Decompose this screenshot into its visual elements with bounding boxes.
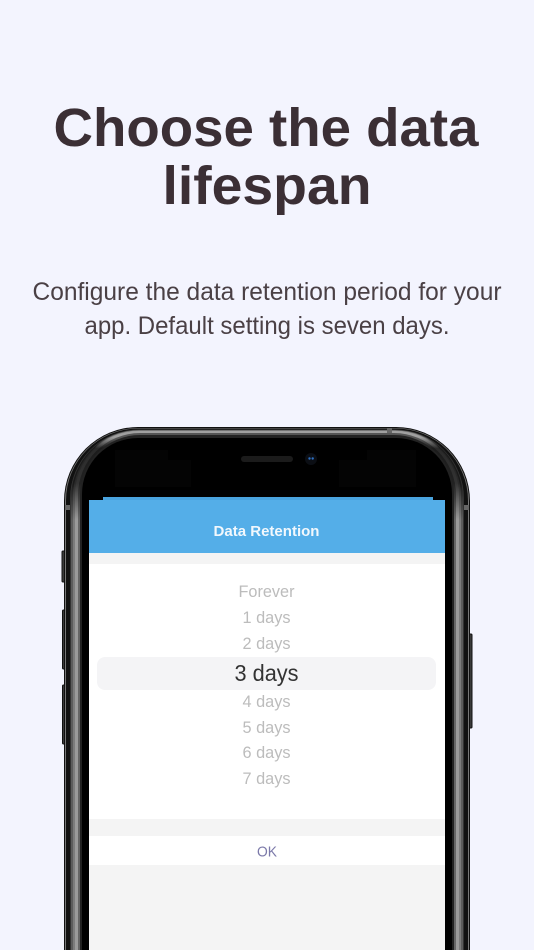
notch shapes [115,450,416,487]
retention options list: 2 days [242,635,290,653]
header bar [89,497,445,553]
antenna marks [65,428,469,510]
retention options list: 6 days [242,744,290,762]
retention options list: 1 days [242,609,290,627]
screen background [89,553,445,950]
retention options list [234,583,298,788]
phone side buttons [62,551,472,744]
title: lifespan [162,156,372,216]
description text [32,278,502,340]
camera [305,453,317,465]
retention options list: 4 days [242,693,290,711]
bottom grey area [89,865,445,950]
title [54,98,479,216]
retention options list: Forever [238,583,295,601]
header bar: Data Retention [214,524,320,540]
title: Choose the data [54,98,479,158]
phone mockup [62,427,472,950]
grey divider band [89,819,445,836]
retention options list: 7 days [242,770,290,788]
OK button: OK [257,844,277,860]
grey band under header [89,553,445,564]
phone frame [64,427,470,950]
retention options list: 3 days [234,660,298,686]
description text: app. Default setting is seven days. [84,312,450,340]
retention options list: 5 days [242,719,290,737]
OK button [89,836,445,865]
screen [89,497,445,950]
selected row highlight [97,657,436,690]
speaker [241,456,293,462]
description text: Configure the data retention period for your [32,278,502,306]
